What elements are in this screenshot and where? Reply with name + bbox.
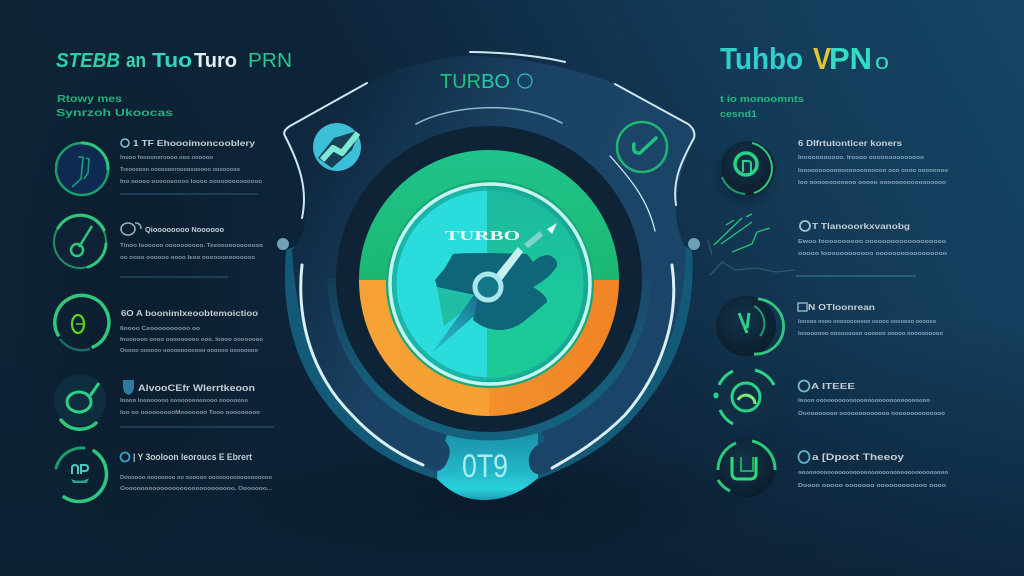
dark speed glyph xyxy=(435,253,557,330)
feature text 3 xyxy=(798,302,944,337)
readout digits: 0T9 xyxy=(462,448,508,484)
feature text 3: N OTloonrean xyxy=(808,302,875,312)
digital readout base xyxy=(437,425,538,500)
feature text 2: Qioooooooo Noooooo xyxy=(145,225,224,234)
feature text 1: 6 DIfrtutonticer koners xyxy=(798,138,902,148)
feature text 1: Ino ooooo oooooeoooo Ioooo oooooooooooooo xyxy=(120,179,263,185)
right subtitle: cesnd1 xyxy=(720,109,757,119)
needle xyxy=(432,223,557,353)
feature text 4: Oooooooooo ooooooooooooo oooooooooooooo xyxy=(798,411,946,417)
feature text 5: Doooooo oooooooo oo oooooo oooooooooooooooooo xyxy=(120,475,273,481)
feature text 3: Ooooo oooooo oooooooooooo oooooo oooooooo xyxy=(120,348,259,354)
feature text 2: Ewoo Ioooooooooo ooooooooooooooooooo xyxy=(798,239,947,245)
feature text 5: Doooo ooooo ooooooo oooooooooooo oooo xyxy=(798,483,947,489)
feature text 2: Tinoo Ioooooo oooooooooo. Teeoooooooooooo xyxy=(120,243,264,249)
inner dial xyxy=(386,180,594,388)
feature text 1: Inoooooooooo. Iroooo oooooooooooooo xyxy=(798,155,925,161)
central gauge device xyxy=(277,52,700,500)
icon: globe ball 4 xyxy=(716,368,777,426)
left feature 4 xyxy=(54,374,274,429)
feature text 3: Iooooo oooo ooooooooooo ooooo ooooooo oooooo xyxy=(798,319,937,325)
feature text 1 xyxy=(798,138,949,186)
feature text 4: A ITEEE xyxy=(811,381,855,391)
left feature 3 xyxy=(55,295,264,354)
right heading block xyxy=(720,41,889,119)
feature text 5 xyxy=(120,452,273,492)
feature text 1: Ioo oooooooooooo ooooo ooooooooooooooooo xyxy=(798,180,947,186)
feature text 2: T Tlanooorkxvanobg xyxy=(812,221,910,231)
left title: Tuo xyxy=(152,50,192,72)
right feature 3 xyxy=(716,296,944,356)
feature text 1 xyxy=(120,138,263,194)
left subtitle: Rtowy mes xyxy=(57,94,123,105)
left title: Turo xyxy=(194,50,237,72)
bolt left xyxy=(277,238,289,250)
right feature 4 xyxy=(716,368,946,426)
feature text 3: 6O A boonimlxeoobtemoictioo xyxy=(121,308,258,318)
feature text 3: Iloooo Ceoooooooooo oo xyxy=(120,326,201,332)
feature text 5: a [Dpoxt Theeoy xyxy=(812,452,904,462)
right feature 5 xyxy=(716,437,949,497)
right title: PN xyxy=(829,41,872,76)
feature text 2 xyxy=(796,221,948,276)
left title: STEBB xyxy=(56,50,120,72)
bolt right xyxy=(688,238,700,250)
feature text 3: Inoooooo oooo ooooooooo ooo. Ioooo oooooooo xyxy=(120,337,264,343)
feature text 2: ooooo Ioooooooooooo ooooooooooooooooo xyxy=(798,251,948,257)
feature text 3 xyxy=(120,308,264,354)
left title: PRN xyxy=(248,50,292,72)
right feature 2 xyxy=(708,214,948,276)
dial label: TURBO xyxy=(445,229,520,244)
feature text 4: Ioo oo oooooooooMooooooo Tooo ooooooooo xyxy=(120,410,261,416)
icon: circle gauge 2 xyxy=(54,215,106,268)
feature text 5: Ooooooooooooooooooooooooooooo. Ooooooo... xyxy=(120,486,273,492)
feature text 1: Inooo fooooneroooo ooo oooooo xyxy=(120,155,214,161)
icon: trend badge xyxy=(313,123,361,171)
right title: V xyxy=(813,41,831,76)
highlight strokes xyxy=(284,52,694,468)
left heading block xyxy=(56,50,292,119)
feature text 4: AlvooCEfr Wlerrtkeoon xyxy=(138,383,255,394)
icon: check badge xyxy=(617,122,667,172)
feature text 2: oo oooo oooooo oooo Ieoo oooooooooooooo xyxy=(120,255,256,261)
teal inner arc xyxy=(332,279,646,436)
left subtitle xyxy=(56,94,174,119)
speed dial colored ring xyxy=(359,150,619,416)
icon: circle gauge 5 xyxy=(56,448,106,501)
feature text 4 xyxy=(798,380,946,417)
feature text 5: | Y 3ooloon Ieoroucs E Ebrert xyxy=(133,452,252,462)
right subtitle: t io monoomnts xyxy=(720,94,804,104)
feature text 4: Inooo Ioooooooo ooooooooooooo oooooooo xyxy=(120,398,249,404)
feature text 1: 1 TF Ehoooimoncooblery xyxy=(133,138,255,148)
feature text 1: Treoooooo ooooooeroooooooooo oooooooo xyxy=(120,167,241,173)
device teal rim xyxy=(285,240,693,479)
icon: speed lines xyxy=(708,214,795,275)
icon: dark ball 3 xyxy=(716,296,784,356)
right title: Tuhbo xyxy=(720,41,803,76)
right title: o xyxy=(875,49,889,74)
feature text 5: ooooooooooooooooooooooooooooooooooooooooo xyxy=(798,470,949,476)
icon: circle gauge 1 xyxy=(48,135,116,203)
feature text 2 xyxy=(120,223,264,277)
right feature 1 xyxy=(709,138,949,211)
feature text 5 xyxy=(798,451,949,489)
green glyph shading xyxy=(437,287,474,326)
left feature 1 xyxy=(48,135,263,203)
left subtitle: Synrzoh Ukoocas xyxy=(56,108,174,119)
feature text 4 xyxy=(120,380,274,427)
feature text 1: Iooooooooooooooooooooooo ooo oooo oooooooo xyxy=(798,168,949,174)
feature text 4: Ioooo ooooooooooooooooooooooooooooooo xyxy=(798,398,931,404)
left feature 5 xyxy=(56,448,273,501)
top label: TURBO xyxy=(440,71,510,93)
outer dark ring xyxy=(336,126,642,432)
left feature 2 xyxy=(54,215,264,277)
icon: ball gauge 4 xyxy=(54,374,106,429)
icon: circle gauge 3 xyxy=(55,295,109,350)
device body and top plate xyxy=(283,56,695,474)
right subtitle xyxy=(720,94,804,119)
feature text 3: Ioooooooo ooooooooo oooooo ooooo oooooooooo xyxy=(798,331,944,337)
icon: dark ball 1 xyxy=(709,139,781,211)
icon: U ball 5 xyxy=(716,437,776,497)
left title: an xyxy=(126,50,146,72)
